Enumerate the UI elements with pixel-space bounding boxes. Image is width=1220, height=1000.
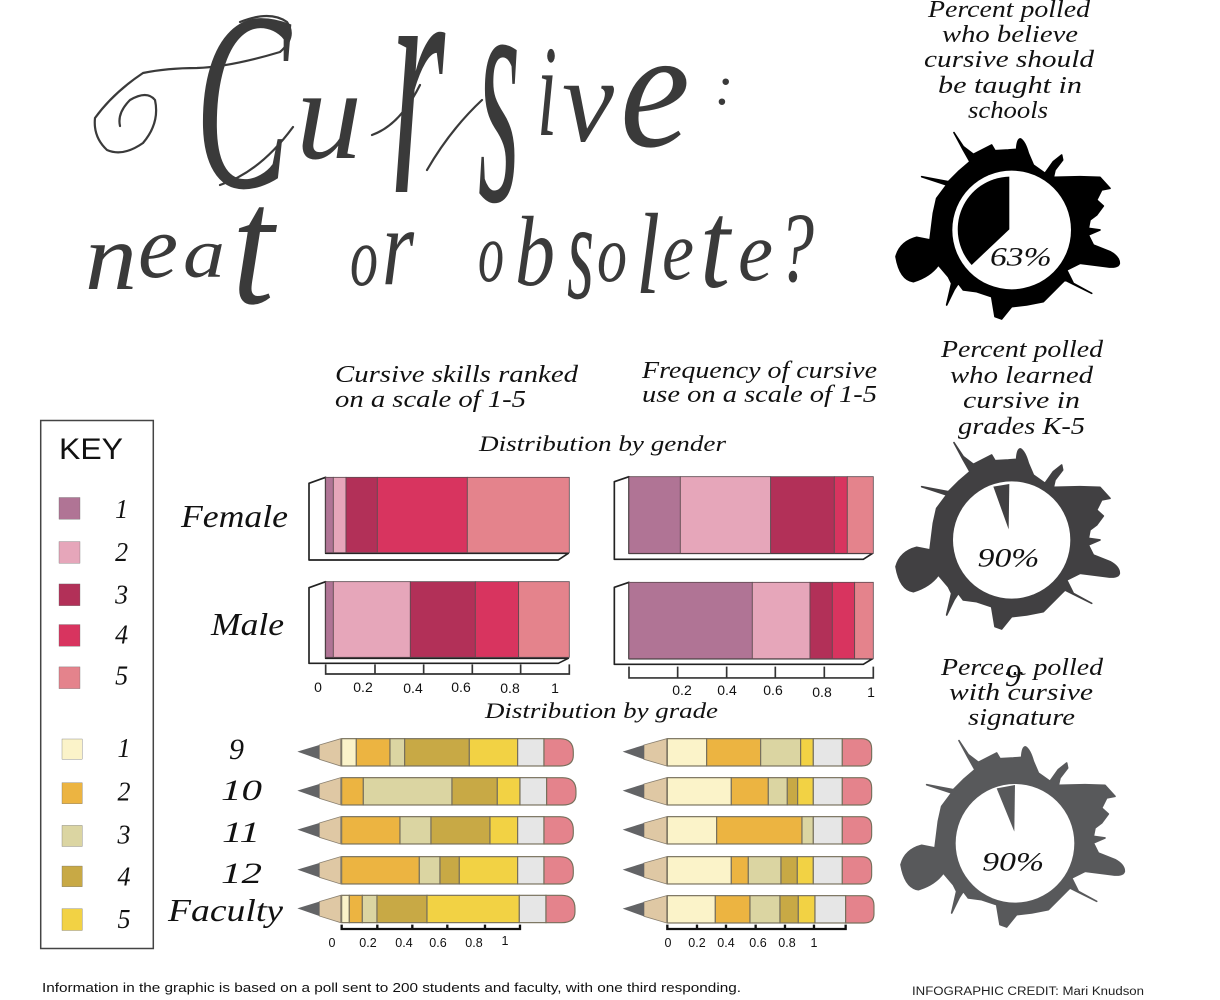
title: [85, 0, 814, 340]
pencil axis labels: skills: 0.4: [395, 936, 413, 950]
axis: [667, 925, 846, 929]
pencil: grade 9: [623, 739, 872, 766]
heading: learned cursive in grades K-5: who learned: [950, 363, 1094, 389]
skills axis labels: 0.2: [353, 679, 373, 695]
heading: learned cursive in grades K-5: Percent polled: [940, 337, 1104, 363]
skills axis labels: 0: [314, 679, 322, 695]
female skills bar: [309, 477, 569, 560]
key swatches and numbers: 5: [115, 660, 128, 691]
panel: key: [41, 420, 153, 948]
title: e: [620, 0, 690, 183]
grade labels: 10: [221, 774, 262, 807]
frequency axis labels: [672, 682, 875, 700]
title: o: [350, 210, 378, 304]
key swatches and numbers: 5: [117, 903, 130, 934]
female frequency bar: [614, 477, 873, 559]
heading: cursive signature: [940, 655, 1104, 731]
pencil axis labels: skills: 0.6: [429, 936, 447, 950]
pencil axis labels: frequency: 0.8: [778, 936, 796, 950]
pencil axis labels: frequency: 1: [811, 936, 818, 950]
title: t: [232, 152, 277, 340]
title: n: [85, 204, 137, 310]
title: a: [183, 216, 225, 293]
heading: cursive signature: signature: [968, 705, 1075, 731]
pencil axis labels: skills: [329, 934, 509, 950]
heading: believe cursive should be taught: cursive should: [924, 47, 1095, 73]
heading: learned cursive in grades K-5: cursive in: [963, 388, 1080, 414]
grade labels: 11: [222, 816, 260, 849]
pencil axis labels: skills: 1: [502, 934, 509, 948]
pencil: grade 12: [623, 857, 872, 884]
key swatches and numbers: 1: [117, 733, 130, 763]
heading: learned cursive in grades K-5: [940, 337, 1104, 440]
key swatches and numbers: 2: [117, 776, 130, 807]
pencil axis labels: skills: 0: [329, 936, 336, 950]
title: r: [382, 186, 415, 308]
title: e: [662, 204, 694, 298]
bar chart: skills by gender: [309, 477, 569, 674]
skills axis labels: 1: [551, 680, 559, 696]
frequency axis labels: 0.4: [717, 682, 737, 698]
title: e: [138, 198, 178, 297]
grade labels: 9: [229, 733, 244, 766]
bar chart: frequency by gender: [614, 477, 873, 678]
skills axis labels: 0.4: [403, 680, 423, 696]
ink blot pie chart: 90% signature: 90%: [982, 847, 1044, 876]
title: :: [715, 55, 733, 116]
key swatches and numbers: 4: [115, 619, 128, 650]
column heading: skills: [335, 362, 579, 413]
title: e: [738, 205, 773, 299]
axis: [342, 925, 520, 929]
frequency axis labels: 0.6: [763, 682, 783, 698]
credit: INFOGRAPHIC CREDIT: Mari Knudson: [912, 986, 1144, 998]
key swatches and numbers: 1: [115, 493, 128, 524]
title: b: [515, 196, 555, 307]
title: v: [562, 34, 615, 167]
axis: [326, 664, 569, 674]
heading: believe cursive should be taught: schools: [968, 98, 1048, 124]
heading: cursive signature: with cursive: [949, 680, 1093, 706]
footnote: Information in the graphic is based on a poll sent to 200 students and faculty, with one third responding.: [42, 981, 741, 995]
pencil axis labels: frequency: 0: [665, 936, 672, 950]
label: Male: Male: [210, 606, 284, 642]
column heading: frequency: [641, 358, 877, 408]
column heading: frequency: use on a scale of 1-5: [642, 382, 877, 408]
ink blot pie chart: 90% learned: [896, 443, 1119, 629]
grade labels: 12: [221, 857, 262, 890]
column heading: skills: on a scale of 1-5: [335, 387, 526, 413]
heading: cursive signature: 9: [1005, 657, 1021, 693]
pencil chart: skills by grade: [297, 739, 576, 929]
skills axis labels: [314, 679, 559, 696]
key swatches and numbers: [59, 493, 130, 934]
pencil: grade 11: [623, 817, 872, 844]
title: t: [700, 177, 733, 315]
frequency axis labels: 1: [867, 684, 875, 700]
heading: distribution by gender: Distribution by gender: [478, 431, 727, 456]
column heading: skills: Cursive skills ranked: [335, 362, 579, 388]
heading: believe cursive should be taught: be taught in: [938, 73, 1082, 99]
frequency axis labels: 0.8: [812, 684, 832, 700]
title: o: [478, 206, 504, 300]
title: s: [567, 174, 594, 329]
pencil: grade 9: [297, 739, 573, 766]
pencil: faculty: [623, 896, 874, 923]
pencil chart: frequency by grade: [623, 739, 874, 929]
pencil: grade 10: [297, 778, 576, 805]
key swatches and numbers: 2: [115, 536, 128, 567]
pencil axis labels: skills: 0.8: [465, 936, 483, 950]
ink blot pie chart: 90% learned: 90%: [978, 544, 1039, 573]
ink blot pie chart: 90% signature: [901, 741, 1124, 927]
panel: key: KEY: [59, 433, 123, 466]
grade labels: Faculty: [167, 892, 284, 928]
pencil: faculty: [297, 895, 575, 923]
grade labels: [167, 733, 284, 928]
title: i: [537, 20, 557, 164]
male frequency bar: [614, 582, 873, 664]
title: o: [597, 211, 627, 299]
pencil axis labels: frequency: 0.4: [717, 936, 735, 950]
label: Female: Female: [180, 498, 288, 534]
heading: distribution by grade: Distribution by grade: [484, 698, 718, 723]
skills axis labels: 0.6: [451, 679, 471, 695]
heading: believe cursive should be taught: who believe: [942, 22, 1078, 48]
heading: cursive signature: Percent polled: [940, 655, 1104, 681]
title: ?: [778, 192, 814, 303]
heading: believe cursive should be taught: [924, 0, 1095, 124]
skills axis labels: 0.8: [500, 680, 520, 696]
pencil axis labels: frequency: [665, 936, 818, 950]
key swatches and numbers: 3: [117, 819, 130, 849]
pencil: grade 10: [623, 778, 872, 805]
pencil axis labels: frequency: 0.6: [749, 936, 767, 950]
male skills bar: [309, 582, 569, 663]
ink blot pie chart: 63%: 63%: [990, 243, 1052, 272]
pencil: grade 12: [297, 857, 573, 884]
pencil axis labels: skills: 0.2: [359, 936, 377, 950]
title: u: [296, 43, 362, 187]
ink blot pie chart: 63%: [896, 133, 1119, 319]
pencil: grade 11: [297, 817, 573, 844]
pencil axis labels: frequency: 0.2: [688, 936, 706, 950]
frequency axis labels: 0.2: [672, 682, 692, 698]
heading: learned cursive in grades K-5: grades K-5: [958, 414, 1085, 440]
axis: [629, 667, 873, 678]
key swatches and numbers: 4: [117, 861, 130, 891]
key swatches and numbers: 3: [114, 579, 128, 610]
title: l: [636, 191, 660, 318]
column heading: frequency: Frequency of cursive: [641, 358, 877, 384]
